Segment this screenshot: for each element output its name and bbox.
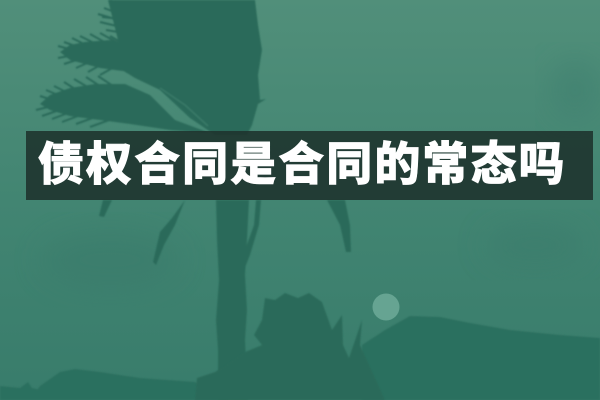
palm canopy xyxy=(108,0,266,135)
small palm silhouette xyxy=(195,293,385,400)
light streaks in canopy xyxy=(135,86,208,126)
top frond xyxy=(98,0,135,34)
title banner xyxy=(26,131,593,200)
title text: 债权合同是合同的常态吗 xyxy=(38,138,567,190)
palm tree xyxy=(36,0,351,400)
trunk xyxy=(216,200,249,400)
hills xyxy=(0,316,600,400)
hanging fronds xyxy=(153,200,185,265)
upper left frond xyxy=(60,40,130,72)
moon xyxy=(372,294,400,320)
lower left frond xyxy=(40,84,210,133)
